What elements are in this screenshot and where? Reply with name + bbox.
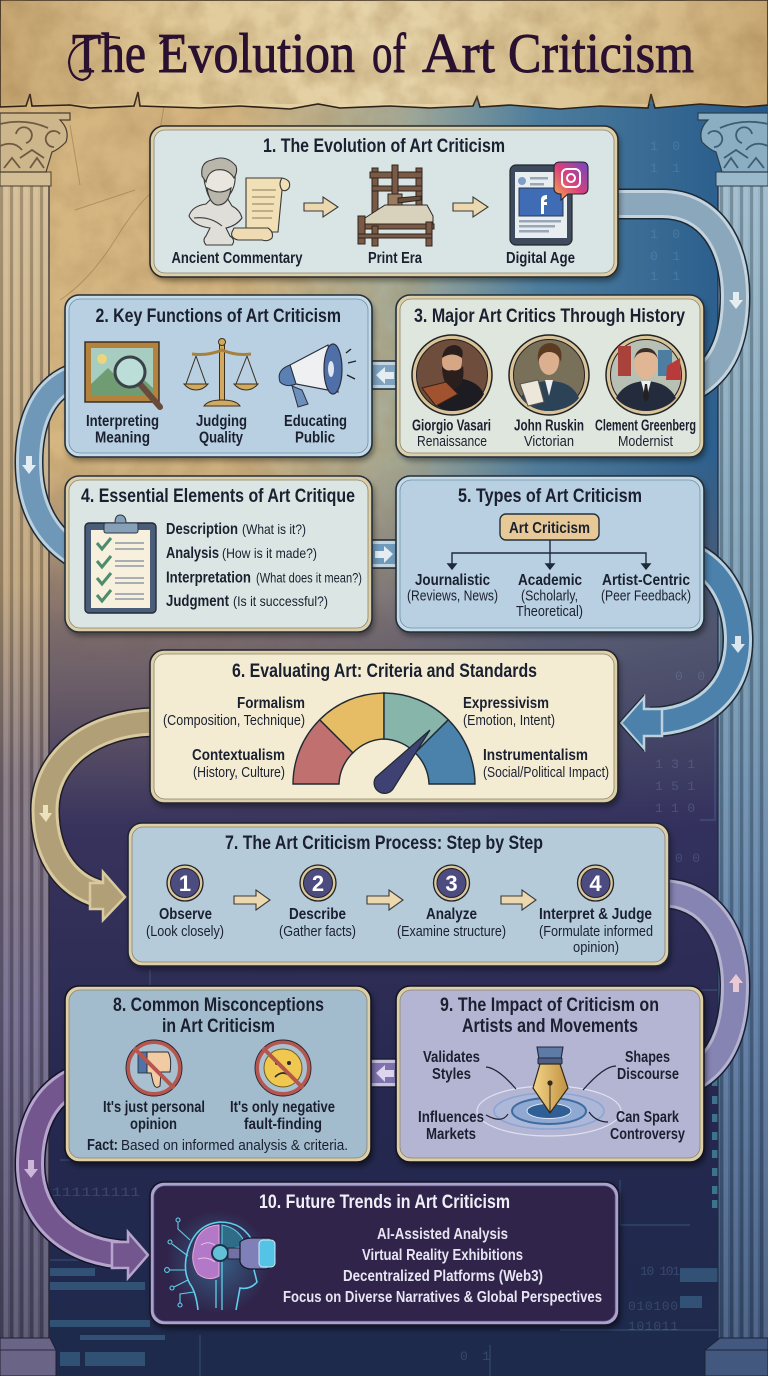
panel 2: key functions: Meaning [95,430,150,446]
background: 1 3 1 [655,757,695,772]
step 3 [397,865,506,940]
step 2 [279,865,356,940]
arrow: 6 to 7 [39,722,158,920]
portrait: Greenberg [606,335,686,415]
panel 9: impact: Can Spark [616,1109,679,1126]
step 2: 2 [312,871,324,896]
panel 9: impact: Markets [426,1126,476,1143]
title: Evolution [158,23,355,85]
panel 4: essential elements: Interpretation [166,570,251,586]
background: 111111111 [52,1185,140,1200]
step 2: (Gather facts) [279,923,356,940]
panel 4: essential elements: (Is it successful?) [233,593,328,609]
panel 1: evolution [150,126,620,281]
trend list [283,1226,602,1306]
tree diagram [448,540,650,569]
panel 4: essential elements: (How is it made?) [222,545,317,561]
step 4: Interpret & Judge [539,906,652,923]
step 1 [146,865,224,940]
panel 6: evaluating art: (Composition, Technique) [163,712,305,729]
trend list: Decentralized Platforms (Web3) [343,1268,543,1285]
background: 010100 [628,1299,678,1314]
background: 0 0 [675,851,700,866]
panel 8: misconceptions: fault-finding [244,1116,322,1133]
panel 3: major critics [396,295,706,461]
icon: megaphone [279,344,356,407]
panel 5: types: Artist-Centric [602,572,690,589]
panel 3: major critics: Victorian [524,433,574,450]
panel 6: evaluating art: Expressivism [463,695,549,712]
step 3: Analyze [426,906,477,923]
heading 4: 4. Essential Elements of Art Critique [81,486,355,507]
fact line: Fact: [87,1137,118,1154]
arrow [234,890,270,910]
arrow: 9 to 8 [364,1059,404,1087]
panel 2: key functions: Public [295,430,335,446]
panel 2: key functions: Educating [284,413,347,430]
panel 10: future trends [150,1182,621,1329]
arrow: 4 to 5 [365,540,403,568]
background: 1 1 0 [655,801,695,816]
title: Criticism [508,23,694,85]
panel 5: types: (Scholarly, [521,588,578,604]
background: 0 1 [460,1349,490,1364]
fact line: Based on informed analysis & criteria. [121,1137,348,1154]
panel 9: impact: Discourse [617,1066,679,1083]
panel 6: evaluating art: (Emotion, Intent) [463,712,555,729]
trend list: Virtual Reality Exhibitions [362,1247,523,1264]
heading 1: 1. The Evolution of Art Criticism [263,136,505,157]
heading 10: 10. Future Trends in Art Criticism [259,1192,510,1213]
background: 1 1 [650,269,680,284]
panel 2: key functions: Judging [196,413,247,430]
panel 3: major critics: John Ruskin [514,418,584,434]
icon: scales [184,338,258,406]
icon: bust and scroll [189,158,290,245]
trend list: AI-Assisted Analysis [377,1226,508,1243]
labels: Interpreting [86,413,159,430]
portrait: Ruskin [509,335,589,415]
background: 1 5 1 [655,779,695,794]
panel 9: impact [396,986,706,1166]
panel 8: misconceptions: It's only negative [230,1099,335,1116]
panel 6: evaluating art: (Social/Political Impact) [483,764,609,781]
panel 9: impact: Artists and Movements [462,1016,638,1037]
labels: Ancient Commentary [172,250,303,267]
title banner: torn parchment [0,0,768,109]
panel 8: misconceptions: opinion [130,1116,177,1133]
panel 9: impact: Controversy [610,1126,685,1143]
arrow: 7 to 9 [660,893,743,1076]
background: 10 101 [640,1264,680,1279]
panel 7: process [128,823,671,970]
icon: tablet with social apps [510,162,588,245]
arrow: 5 to 6 [619,559,745,751]
heading 2: 2. Key Functions of Art Criticism [96,306,341,327]
heading 6: 6. Evaluating Art: Criteria and Standards [232,661,537,682]
background: 101011 [628,1319,678,1334]
icon: clipboard [85,515,156,613]
title: of [372,23,406,85]
panel 4: essential elements: Analysis [166,545,219,562]
heading 7: 7. The Art Criticism Process: Step by Step [225,833,543,854]
panel 2: key functions: Quality [199,430,243,446]
step 4: (Formulate informed [539,923,653,940]
left column [0,113,70,1376]
checklist text: Description [166,521,238,538]
panel 9: impact: Shapes [625,1049,670,1066]
right column [698,113,768,1376]
panel 9: impact: Styles [432,1066,471,1083]
panel 6: evaluating art: Instrumentalism [483,747,588,764]
arrow [304,197,338,217]
panel 3: major critics: Modernist [618,433,674,450]
node: art criticism: Art Criticism [509,520,590,537]
icon: painting with magnifier [85,342,160,407]
panel 8: misconceptions [65,986,373,1166]
icon: brain with VR headset [165,1210,275,1314]
panel 4: essential elements: (What does it mean?) [256,570,362,586]
step 1: 1 [179,871,191,896]
panel 6: evaluating art [150,650,620,807]
panel 1: evolution: Digital Age [506,250,575,267]
panel 1: evolution: Print Era [368,250,422,267]
step 1: (Look closely) [146,923,224,940]
heading 5: 5. Types of Art Criticism [458,486,642,507]
step 4: 4 [589,871,602,896]
leader lines [486,1066,616,1122]
arrow [367,890,403,910]
background: 0 0 [675,669,705,684]
panel 4: essential elements: Judgment [166,593,229,610]
arrow [453,197,488,217]
portrait: Vasari [412,335,492,415]
panel 3: major critics: Clement Greenberg [595,418,696,434]
title: The [72,23,146,85]
arrow: 8 to 10 [24,1082,148,1278]
panel 4: essential elements [65,476,374,636]
arrow: 1 to 3 [610,204,743,384]
trend list: Focus on Diverse Narratives & Global Perspectives [283,1289,602,1306]
panel 5: types: (Peer Feedback) [601,588,691,604]
gauge chart [293,693,475,793]
node: art criticism [500,514,599,540]
background: 1 0 [650,139,680,154]
icon: no thumbs down [126,1040,182,1096]
icon: no sad face [255,1040,311,1096]
panel 5: types: Academic [518,572,582,589]
panel 8: misconceptions: in Art Criticism [162,1016,275,1037]
heading 3: 3. Major Art Critics Through History [414,306,685,327]
panel 5: types [396,476,706,636]
labels: Validates [423,1049,480,1066]
step 2: Describe [289,906,346,923]
panel 3: major critics: Renaissance [417,433,487,450]
panel 9: impact: Influences [418,1109,484,1126]
labels: It's just personal [103,1099,205,1116]
panel 2: key functions [65,295,374,461]
step 4 [539,865,653,956]
arrow: 2 to 4 [22,378,72,552]
panel 5: types: Theoretical) [516,603,583,620]
type labels: Journalistic [415,572,490,589]
labels: Giorgio Vasari [412,418,491,434]
step 4: opinion) [573,939,619,956]
heading 9: 9. The Impact of Criticism on [440,995,659,1016]
icon: printing press [358,165,434,246]
background: 0 1 [650,249,680,264]
icon: pen nib with ripples [477,1047,621,1136]
panel 6: evaluating art: Contextualism [192,747,285,764]
title [69,23,694,85]
background: 1 1 [650,161,680,176]
panel 4: essential elements: (What is it?) [242,521,306,537]
arrow [501,890,536,910]
step 3: (Examine structure) [397,923,506,940]
arrow: 3 to 2 [365,361,403,389]
criteria labels: Formalism [237,695,305,712]
background: 1 0 [650,227,680,242]
step 1: Observe [159,906,212,923]
panel 5: types: (Reviews, News) [407,588,498,604]
step 3: 3 [445,871,458,896]
title: Art [422,23,495,85]
heading 8: 8. Common Misconceptions [113,995,324,1016]
panel 6: evaluating art: (History, Culture) [193,764,285,781]
